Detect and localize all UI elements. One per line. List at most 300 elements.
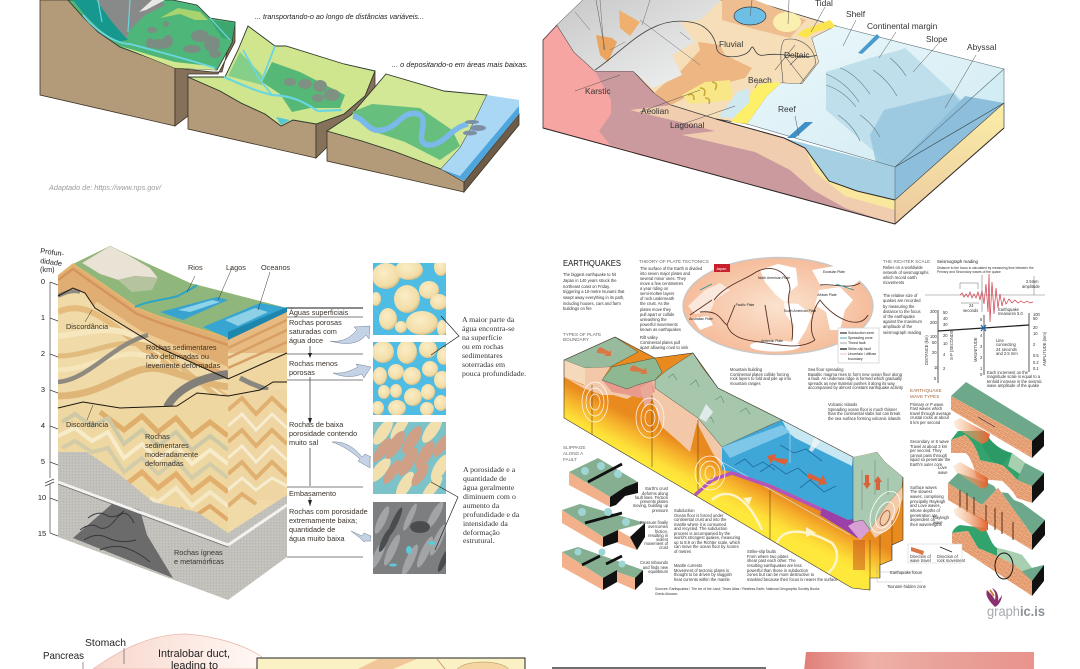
block: middle valley section xyxy=(188,26,375,158)
text: wave descriptions: principally Rayleigh xyxy=(910,499,946,504)
fault block: stage 1 xyxy=(569,458,638,507)
text: subduction: up to 8.9 on the Richter scale, which xyxy=(674,540,741,545)
depth zone rules and labels: quantidade de xyxy=(289,525,335,534)
world map of tectonic plates: North American Plate xyxy=(758,276,790,280)
text: theory of plate tectonics: known as earthquakes xyxy=(640,327,681,332)
text: wave descriptions: Travel at about 3 km xyxy=(910,444,948,449)
text: volcanic islands: Volcanic Islands xyxy=(828,402,857,407)
caption: transport: ... transportando-o ao longo de distâncias variáveis... xyxy=(255,12,424,21)
text: richter scale xyxy=(883,259,930,335)
block labels: Discordância xyxy=(66,420,109,429)
text: richter scale: quakes are recorded xyxy=(883,298,921,303)
wave block: primary wave xyxy=(951,382,1044,458)
caption: deposition: ... o depositando-o em áreas mais baixas. xyxy=(392,60,528,69)
text: richter scale: seismograph reading xyxy=(883,330,922,335)
chart: richter nomogram: and 2.5 mm xyxy=(996,351,1018,356)
block labels: Discordância xyxy=(66,322,109,331)
text: most water near surface: pouca profundidade. xyxy=(462,369,526,378)
text: subduction xyxy=(674,508,741,554)
block labels: Rochas xyxy=(145,432,170,441)
depth axis: Profun- xyxy=(40,246,65,258)
block labels: Oceanos xyxy=(261,263,291,272)
label: stomach: Stomach xyxy=(85,637,126,649)
chart: richter nomogram: 10 xyxy=(934,365,939,370)
arrows to grain insets xyxy=(330,326,371,542)
chart: richter nomogram: 30 xyxy=(943,322,948,327)
text: theory of plate tectonics: semi-molten layers xyxy=(640,291,674,296)
text: richter scale: Relies on a worldwide xyxy=(883,265,924,270)
depth zone rules and labels: porosas xyxy=(289,368,315,377)
earthquake cross-section illustration xyxy=(564,337,906,590)
text: theory of plate tectonics: the crust. As the xyxy=(640,301,670,306)
captions: fault stages xyxy=(633,486,669,574)
text: mantle currents: Movement of tectonic plates is xyxy=(674,568,729,573)
text: wave descriptions: waves, comprising xyxy=(910,494,944,499)
text: wave descriptions: Love xyxy=(938,465,948,470)
text: mountain building: Continental plates collide forcing xyxy=(730,372,790,377)
block labels: sedimentares xyxy=(145,441,189,450)
text: theory of plate tectonics: Rift valley xyxy=(640,335,659,340)
block: mountain stream section xyxy=(40,0,235,126)
intro paragraph xyxy=(563,272,625,311)
text: theory of plate tectonics: pull apart or collide xyxy=(640,312,675,317)
environment labels: Karstic xyxy=(585,86,611,96)
wave legend: Direction of xyxy=(937,554,959,559)
text: porosity decreases with depth: A porosidade e a xyxy=(463,465,516,474)
block: floodplain and delta section xyxy=(327,74,519,192)
depth zone rules and labels: Rochas de baixa xyxy=(289,420,344,429)
chart: richter nomogram: 0.2 xyxy=(1033,360,1039,365)
text: porosity decreases with depth: aumento da xyxy=(463,501,500,510)
text: theory of plate tectonics: apart allowing crust to sink xyxy=(640,345,689,350)
world map of tectonic plates: Pacific Plate xyxy=(736,303,754,307)
text: wave descriptions: The slowest xyxy=(910,489,933,494)
depth zone rules and labels: porosidade contendo xyxy=(289,429,357,438)
environment labels: Aeolian xyxy=(641,106,669,116)
chart: seismograph reading: 24 xyxy=(969,303,974,308)
environment labels: Lagoonal xyxy=(670,120,705,130)
fault block: stage 2 xyxy=(562,504,645,550)
depth zone rules and labels: água doce xyxy=(289,336,323,345)
chart: richter nomogram: 0.5 xyxy=(1033,353,1039,358)
text: richter scale: The relative size of xyxy=(883,293,918,298)
text: wave descriptions: dependent on xyxy=(910,517,936,522)
text: theory of plate tectonics: unleashing the xyxy=(640,317,667,322)
chart: richter nomogram: S-P (SECONDS) xyxy=(949,329,954,360)
text: mountain building: mountain ranges xyxy=(730,381,760,386)
text: wave descriptions: Earth's outer core xyxy=(910,462,943,467)
text: volcanic islands xyxy=(828,402,901,421)
heading: wave types: EARTHQUAKE xyxy=(910,388,942,393)
text: theory of plate tectonics: The surface of the Earth is divided xyxy=(640,266,703,271)
captions: fault stages: deforms along xyxy=(642,491,669,496)
depth axis: didade xyxy=(40,256,63,268)
text: strike-slip faults: shear past each other. The xyxy=(747,558,796,563)
heading: slippage along a fault: ALONG A xyxy=(563,451,584,456)
text: sea floor spreading: Basaltic magma rises to form new ocean floor along xyxy=(808,372,903,377)
text: theory of plate tectonics: into seven major plates and xyxy=(640,271,691,276)
text: volcanic islands: Spreading ocean floor is much thinner xyxy=(828,407,898,412)
heading: earthquakes: EARTHQUAKES xyxy=(563,258,621,268)
detail inset box xyxy=(257,658,525,669)
environment labels: Deltaic xyxy=(784,50,810,60)
labels: focus and tsunami xyxy=(877,563,927,589)
chart: seismograph reading xyxy=(925,259,1045,322)
block labels: levemente deformadas xyxy=(146,361,221,370)
logo: graphic.is xyxy=(986,588,1045,619)
depth zone rules and labels: Águas superficiais xyxy=(289,308,349,317)
text: porosity decreases with depth xyxy=(463,465,520,545)
depth axis xyxy=(38,246,65,538)
text: subduction: and recycled. The subduction xyxy=(674,526,728,531)
chart: richter nomogram: connecting xyxy=(996,342,1017,347)
chart: richter nomogram: 20 xyxy=(1033,325,1038,330)
text: theory of plate tectonics: Continental plates pull xyxy=(640,340,680,345)
captions: fault stages: crust xyxy=(659,545,669,550)
text: strike-slip faults: Strike-slip faults xyxy=(747,549,776,554)
block labels: moderadamente xyxy=(145,450,198,459)
chart: richter nomogram: 20 xyxy=(932,350,937,355)
heading: wave types: WAVE TYPES xyxy=(910,394,939,399)
text: porosity decreases with depth: deformação xyxy=(463,528,500,537)
text: porosity decreases with depth: diminuem com o xyxy=(463,492,516,501)
text: subduction: Ocean floor is forced under xyxy=(674,513,724,518)
depth zone rules and labels: água muito baixa xyxy=(289,534,346,543)
depth axis: 0 xyxy=(41,277,45,286)
text: theory of plate tectonics: plates move they xyxy=(640,307,672,312)
heading: slippage along a fault: FAULT xyxy=(563,457,577,462)
grain inset: metamorphic very low porosity xyxy=(373,502,446,574)
text: sea floor spreading: accompanied by almost constant earthquake activity xyxy=(808,385,904,390)
environment labels: Beach xyxy=(748,75,772,85)
captions: fault stages: resulting in xyxy=(648,533,669,538)
text: wave descriptions: travel through average xyxy=(910,411,952,416)
panel: river erosion blocks xyxy=(40,0,528,192)
text: most water near surface: ou em rochas xyxy=(462,342,504,351)
panel: depositional environments block xyxy=(543,0,1004,224)
intro paragraph: northeast coast on Friday, xyxy=(563,284,610,289)
chart: richter nomogram: 3 xyxy=(980,344,983,349)
text: strike-slip faults: zones but can be more destructive to xyxy=(747,572,815,577)
depth zone rules and labels: extremamente baixa; xyxy=(289,516,357,525)
world map of tectonic plates: Australian Plate xyxy=(689,317,713,321)
text: wave descriptions: their wavelengths xyxy=(910,522,942,527)
captions: fault stages: violent xyxy=(656,537,669,542)
chart: seismograph reading: seconds xyxy=(963,308,978,313)
block labels: e metamórficas xyxy=(174,557,224,566)
depth zone rules and labels: Rochas menos xyxy=(289,359,338,368)
heading: slippage along a fault: SLIPPAGE xyxy=(563,445,585,450)
block labels xyxy=(66,263,291,566)
text: wave descriptions: liquid so penetrate the xyxy=(910,457,951,462)
environment labels: Fluvial xyxy=(719,39,743,49)
grain inset: lower porosity xyxy=(373,342,446,415)
heading: plate boundary types xyxy=(563,332,601,342)
chart: richter nomogram: 100 xyxy=(1033,312,1041,317)
text: mantle currents: thought to be driven by sluggish xyxy=(674,572,733,577)
chart: seismograph reading: amplitude xyxy=(1022,284,1040,289)
text: subduction: can move the ocean floor by scores xyxy=(674,544,739,549)
text: wave descriptions: and Love waves, xyxy=(910,503,941,508)
text: wave descriptions: Secondary or S wave xyxy=(910,439,950,444)
intro paragraph: including houses, cars and farm xyxy=(563,301,621,306)
text: theory of plate tectonics: a year riding on xyxy=(640,286,669,291)
environment labels: Shelf xyxy=(846,9,866,19)
text: wave descriptions: 5 km per second xyxy=(910,420,941,425)
text: richter scale: which record earth xyxy=(883,275,917,280)
world map of tectonic plates: South American Plate xyxy=(784,309,816,313)
chart: richter nomogram: 40 xyxy=(943,316,948,321)
chart: richter nomogram: 2 xyxy=(1033,342,1036,347)
map legend: Uncertain / diffuse xyxy=(848,352,876,356)
labels: focus and tsunami: Earthquake focus xyxy=(890,570,922,575)
map legend: Subduction zone xyxy=(848,331,874,335)
chart: richter nomogram xyxy=(924,307,1047,388)
text: volcanic islands: the sea surface forming volcanic islands xyxy=(828,416,901,421)
grain inset: high porosity xyxy=(373,263,446,335)
text: wave descriptions: crustal rocks at about xyxy=(910,415,950,420)
depth zone rules and labels: muito sal xyxy=(289,438,319,447)
label: stomach xyxy=(85,637,126,664)
chart: richter nomogram: 1 xyxy=(980,366,983,371)
panel: pancreas anatomy (cropped) xyxy=(43,634,1034,669)
sources: Sources: Earthquakes / The ice of the Land; Times Atlas / Restless Earth; National Geographic Society Books xyxy=(655,587,820,591)
chart: richter nomogram: wave amplitude of the quake xyxy=(987,383,1040,388)
text: sea floor spreading: spreads as new material pushes it along its way, xyxy=(808,381,896,386)
wave legend xyxy=(908,544,966,563)
depth zone rules and labels: Embasamento xyxy=(289,489,336,498)
heading: slippage along a fault xyxy=(563,445,585,462)
callout pointers xyxy=(431,316,459,550)
text: strike-slip faults: resulting earthquakes are less xyxy=(747,563,802,568)
chart: richter nomogram: 50 xyxy=(1033,316,1038,321)
text: theory of plate tectonics: of rock underneath xyxy=(640,296,675,301)
block labels: deformadas xyxy=(145,459,184,468)
text: richter scale: THE RICHTER SCALE xyxy=(883,259,930,264)
environment labels: Continental margin xyxy=(867,21,938,31)
environment labels: Abyssal xyxy=(967,42,996,52)
text: mantle currents xyxy=(674,563,733,582)
environment labels: Reef xyxy=(778,104,796,114)
chart: richter nomogram: AMPLITUDE (mm) xyxy=(1042,331,1047,366)
sources: Gredo Atosavo xyxy=(655,592,678,596)
heading: plate boundary types: TYPES OF PLATE xyxy=(563,332,601,337)
world map of tectonic plates: Eurasian Plate xyxy=(823,270,845,274)
world map of tectonic plates xyxy=(683,258,873,354)
depth zone rules and labels: saturadas com xyxy=(289,327,337,336)
map legend: Spreading zone xyxy=(848,336,873,340)
chart: seismograph reading: Primary and Secondary waves of the quake xyxy=(937,270,1001,274)
text: most water near surface: soterradas em xyxy=(462,360,505,369)
text: richter scale: of the earthquake xyxy=(883,314,916,319)
text: richter scale: movements xyxy=(883,280,904,285)
text: strike-slip faults: powerful than those in subduction xyxy=(747,568,809,573)
captions: fault stages: pressure xyxy=(652,508,669,513)
heading: plate boundary types: BOUNDARY xyxy=(563,337,589,342)
fault block: stage 3 xyxy=(562,547,643,590)
text: porosity decreases with depth: quantidade de xyxy=(463,474,507,483)
text: wave descriptions: wave xyxy=(933,520,943,525)
text: theory of plate tectonics: THEORY OF PLATE TECTONICS xyxy=(639,259,709,264)
captions: fault stages: movement of xyxy=(644,541,669,546)
text: subduction: world's strongest quakes, measuring xyxy=(674,535,741,540)
captions: fault stages: overcomes xyxy=(648,524,668,529)
world map of tectonic plates: Antarctic Plate xyxy=(761,339,783,343)
chart: richter nomogram: 300 xyxy=(930,309,938,314)
depth zone rules and labels: Rochas com porosidade xyxy=(289,507,368,516)
land surface xyxy=(557,0,836,124)
block labels: Rochas ígneas xyxy=(174,548,223,557)
text: porosity decreases with depth: profundidade e da xyxy=(463,510,520,519)
chart: richter nomogram: Earthquake xyxy=(998,307,1020,312)
text: strike-slip faults: mankind because their focus is nearer the surface xyxy=(747,577,838,582)
chart: richter nomogram: 4 xyxy=(943,352,946,357)
text: wave descriptions: Primary or P wave xyxy=(910,402,944,407)
text: most water near surface xyxy=(462,315,526,378)
chart: richter nomogram: 2 xyxy=(980,355,983,360)
chart: richter nomogram: Each increment on the xyxy=(987,370,1029,375)
chart: richter nomogram: 24 seconds xyxy=(996,347,1017,352)
grey header bar xyxy=(552,667,766,669)
world map of tectonic plates: African Plate xyxy=(817,293,837,297)
intro paragraph: buildings on fire xyxy=(563,306,592,311)
wave block: love wave xyxy=(948,462,1045,550)
depth zone rules and labels: Rochas porosas xyxy=(289,318,342,327)
chart: richter nomogram: 5 xyxy=(934,376,937,381)
source credit: Adaptado de: https://www.nps.gov/ xyxy=(48,185,162,192)
chart: richter nomogram: 50 xyxy=(932,340,937,345)
logo: graphic.is: graphic.is xyxy=(987,603,1045,619)
text: subduction: process is accompanied by the xyxy=(674,531,731,536)
chart: richter nomogram: DISTANCE (km) xyxy=(924,335,929,365)
text: theory of plate tectonics: move a few centimetres xyxy=(640,281,683,286)
wave legend: Direction of xyxy=(910,554,932,559)
block labels: Lagos xyxy=(226,263,246,272)
block labels: Rios xyxy=(188,263,203,272)
text: volcanic islands: than the continental slabs but can break xyxy=(828,411,901,416)
text: mantle currents: Mantle currents xyxy=(674,563,702,568)
text: wave descriptions: Rayleigh xyxy=(933,515,950,520)
map legend: boundary xyxy=(848,357,863,361)
panel: subsurface water cross-section xyxy=(38,246,526,600)
block labels: Rochas sedimentares xyxy=(146,343,217,352)
world map of tectonic plates: Japan xyxy=(716,267,726,271)
map legend: Strike-slip fault xyxy=(848,347,871,351)
captions: fault stages: friction, xyxy=(655,529,668,534)
text: subduction: Subduction xyxy=(674,508,695,513)
text: most water near surface: água encontra-se xyxy=(462,324,515,333)
text: richter scale: by measuring the xyxy=(883,304,915,309)
wave block: secondary wave xyxy=(951,418,1044,503)
block diagram xyxy=(58,246,288,600)
map legend xyxy=(838,328,879,363)
chart: richter nomogram: 10 xyxy=(943,341,948,346)
text: mountain building: rock layers to fold and pile up into xyxy=(730,376,792,381)
text: wave descriptions: penetration are xyxy=(910,513,938,518)
chart: seismograph reading: Distance to the focus is calculated by measuring time between the xyxy=(937,266,1034,270)
text: theory of plate tectonics xyxy=(639,259,709,350)
chart: seismograph reading: 2.5mm xyxy=(1026,279,1039,284)
depth axis: 4 xyxy=(41,421,45,430)
chart: richter nomogram: measures 5.0 xyxy=(998,311,1024,316)
ocean surface and bathymetry xyxy=(543,26,1004,224)
wave block: rayleigh wave xyxy=(952,506,1044,596)
captions: fault stages: fault lines. Friction xyxy=(635,495,669,500)
text: wave descriptions: cannot pass through xyxy=(910,453,948,458)
label: intralobar duct xyxy=(158,648,230,669)
label: intralobar duct: Intralobar duct, xyxy=(158,648,230,660)
crust: beige wedge under left plates xyxy=(564,377,725,472)
environment labels xyxy=(575,0,996,136)
chart: richter nomogram: MAGNITUDE xyxy=(973,337,978,362)
text: most water near surface: A maior parte da xyxy=(462,315,515,324)
panel: earthquakes infographic xyxy=(562,258,1047,596)
captions: fault stages: prevents plates xyxy=(640,499,668,504)
text: wave descriptions: wave xyxy=(938,470,948,475)
text: richter scale: amplitude of the xyxy=(883,324,913,329)
captions: fault stages: equilibrium xyxy=(648,569,669,574)
text: subduction: of metres xyxy=(674,549,691,554)
chart: richter nomogram: 6 xyxy=(980,317,983,322)
chart: richter nomogram: 0 xyxy=(980,372,983,377)
text: richter scale: distance to the focus xyxy=(883,309,921,314)
text: sea floor spreading: a fault. An undersea ridge is formed which gradually xyxy=(808,376,903,381)
text: mountain building xyxy=(730,367,792,386)
text: mountain building: Mountain building xyxy=(730,367,763,372)
depth axis: 5 xyxy=(41,457,45,466)
wave legend: rock movement xyxy=(937,558,966,563)
text: wave descriptions: whose depths of xyxy=(910,508,941,513)
depth axis: 10 xyxy=(38,493,46,502)
text: sea floor spreading xyxy=(808,367,904,390)
cross-section front face xyxy=(543,25,895,224)
chart: richter nomogram: 200 xyxy=(930,320,938,325)
text: subduction: mantle where it is consumed xyxy=(674,522,727,527)
text: wave descriptions xyxy=(910,402,952,527)
text: sea floor spreading: Sea floor spreading xyxy=(808,367,844,372)
depth axis: 2 xyxy=(41,349,45,358)
intro paragraph: The biggest earthquake to hit xyxy=(563,272,617,277)
wave legend: wave travel xyxy=(910,558,931,563)
text: richter scale: network of seismographs xyxy=(883,270,929,275)
chart: richter nomogram: 0.1 xyxy=(1033,366,1039,371)
block labels: não deformadas ou xyxy=(146,352,209,361)
intro paragraph: triggering a 10-metre tsunami that xyxy=(563,289,625,294)
text: most water near surface: na superfície xyxy=(462,333,503,342)
chart: richter nomogram: 2 xyxy=(943,366,946,371)
chart: richter nomogram: 50 xyxy=(943,310,948,315)
chart: richter nomogram: tenfold increase in the seismic xyxy=(987,379,1042,384)
text: mantle currents: heat currents within the mantle xyxy=(674,577,730,582)
captions: fault stages: Earth's crust xyxy=(645,486,669,491)
chart: richter nomogram: 20 xyxy=(943,333,948,338)
depth axis: 1 xyxy=(41,313,45,322)
captions: fault stages: Pressure finally xyxy=(640,520,669,525)
red tissue panel xyxy=(804,652,1034,669)
chart: seismograph reading: Seismograph reading xyxy=(937,259,978,264)
text: subduction: continental crust and into the xyxy=(674,517,727,522)
chart: richter nomogram: 10 xyxy=(1033,331,1038,336)
map legend: Thrust fault xyxy=(848,341,866,345)
chart: richter nomogram: magnitude scale is equal to a xyxy=(987,374,1041,379)
depth axis: 3 xyxy=(41,385,45,394)
heading: wave types xyxy=(910,388,942,399)
chart: richter nomogram: 4 xyxy=(980,333,983,338)
text: strike-slip faults xyxy=(747,549,838,582)
environment labels: Slope xyxy=(926,34,948,44)
text: porosity decreases with depth: intensidade da xyxy=(463,519,508,528)
chart: richter nomogram: 100 xyxy=(930,334,938,339)
